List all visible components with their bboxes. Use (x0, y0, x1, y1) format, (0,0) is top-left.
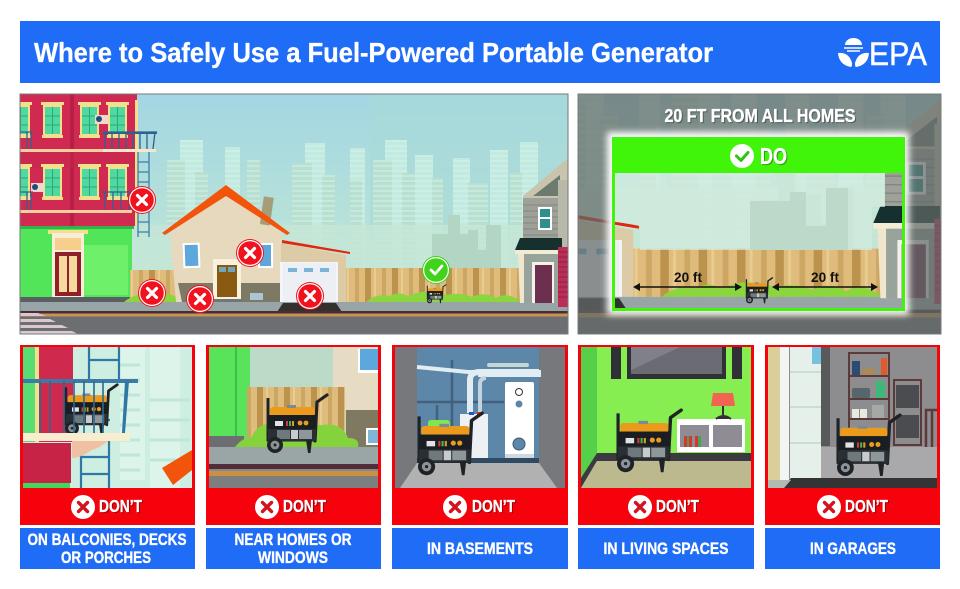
caption: garages (765, 528, 940, 569)
caption: near homes (206, 528, 381, 569)
caption: balconies: OR PORCHES (61, 548, 151, 567)
illustration: garage (768, 347, 937, 488)
right distance arrow: 20 ft (811, 269, 839, 285)
icon: unsafe near house (186, 285, 214, 313)
icon: EPA logo (838, 36, 928, 72)
don't label: DON’T (845, 496, 888, 516)
caption: balconies (20, 528, 195, 569)
caption: living spaces: IN LIVING SPACES (604, 539, 728, 558)
don't icon (817, 495, 841, 519)
card: basements (392, 345, 568, 525)
don't icon (71, 495, 95, 519)
title: Where to Safely Use a Fuel-Powered Portable Generator (34, 37, 713, 68)
header banner (20, 21, 940, 83)
panel: 20 ft from all homes (578, 94, 942, 334)
illustration: balcony (23, 347, 192, 488)
card: balconies (20, 345, 195, 525)
don't icon (255, 495, 279, 519)
don't label: DON’T (472, 496, 515, 516)
icon: unsafe near window (236, 239, 264, 267)
generator (746, 278, 772, 303)
don't label: DON’T (283, 496, 326, 516)
illustration: near homes (209, 347, 378, 488)
panel: street scene overview (9, 94, 568, 334)
illustration: living room (581, 347, 751, 488)
icon: check (730, 144, 754, 168)
caption: balconies: ON BALCONIES, DECKS (28, 530, 186, 549)
caption: living spaces (578, 528, 754, 569)
don't label: DON’T (99, 496, 142, 516)
card: garages (765, 345, 940, 525)
don't label: DON’T (656, 496, 699, 516)
icon: unsafe on balcony (128, 186, 156, 214)
heading: 20 FT FROM ALL HOMES (664, 105, 856, 126)
caption: near homes: WINDOWS (258, 548, 328, 567)
caption: garages: IN GARAGES (810, 539, 896, 558)
EPA wordmark: EPA (869, 36, 928, 72)
right distance arrow (772, 269, 878, 291)
generator in safe location (427, 285, 446, 303)
don't icon (628, 495, 652, 519)
left distance arrow (633, 269, 742, 291)
icon: unsafe near bushes (138, 279, 166, 307)
glow frame (607, 132, 909, 315)
caption: basements (392, 528, 568, 569)
icon: safe check (422, 256, 450, 284)
left distance arrow: 20 ft (674, 269, 702, 285)
illustration: basement (395, 347, 565, 488)
caption: basements: IN BASEMENTS (427, 539, 533, 558)
card: living spaces (578, 345, 754, 525)
don't icon (443, 495, 467, 519)
do frame (612, 137, 905, 311)
icon: unsafe in garage (296, 282, 324, 310)
caption: near homes: NEAR HOMES OR (234, 530, 352, 549)
card: near homes (206, 345, 381, 525)
do label: DO (760, 143, 787, 169)
